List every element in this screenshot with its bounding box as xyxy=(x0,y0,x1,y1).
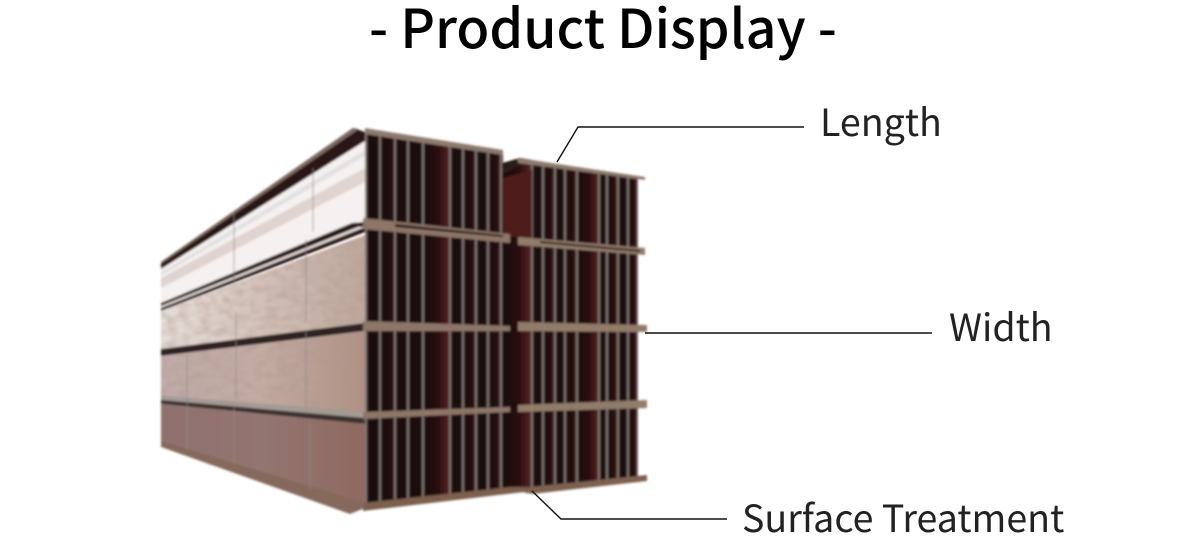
wide reddish bays xyxy=(381,130,638,510)
fourth row flanges xyxy=(363,407,510,419)
third row flanges xyxy=(363,321,510,331)
tier 2 web xyxy=(161,235,365,350)
left side faces of the beams xyxy=(161,128,365,514)
dark web background xyxy=(365,125,645,515)
front end faces of the beams xyxy=(365,125,645,515)
splice seams xyxy=(187,168,313,490)
label: Length xyxy=(820,92,942,147)
top edge flanges xyxy=(365,128,503,155)
tier 3 web xyxy=(161,331,365,412)
label: Width xyxy=(949,297,1053,352)
bottom flanges xyxy=(363,487,532,511)
leader line xyxy=(557,127,804,162)
leader line xyxy=(645,332,932,334)
tier 1 web stripes xyxy=(161,150,365,288)
tier 4 top flange xyxy=(161,396,365,424)
bottom flange xyxy=(161,441,365,514)
stacked steel H-beams image xyxy=(161,125,647,515)
tier 2 top flange xyxy=(161,222,365,311)
second row flanges xyxy=(363,218,510,243)
label: Surface Treatment xyxy=(742,488,1064,543)
vertical flange ribs xyxy=(366,125,638,515)
tier 4 web xyxy=(161,404,365,504)
callout: Surface Treatment xyxy=(532,488,1064,543)
leader line xyxy=(532,491,727,519)
tier 1 web xyxy=(161,140,365,304)
horizontal flange bands xyxy=(363,128,647,511)
tier 3 top flange xyxy=(161,323,365,356)
rear beam end at the gap xyxy=(503,170,532,238)
callout: Length xyxy=(557,92,942,162)
tier 1 top flange xyxy=(161,128,365,269)
